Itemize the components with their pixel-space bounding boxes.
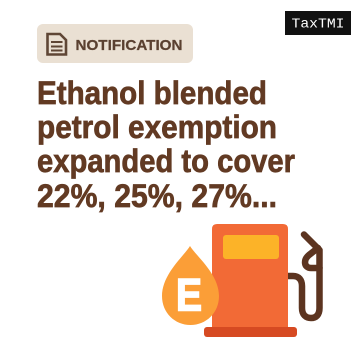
title: petrol exemption <box>37 109 277 145</box>
title <box>37 75 295 214</box>
title: Ethanol blended <box>37 75 267 111</box>
badge label: NOTIFICATION <box>76 37 182 54</box>
icon: ethanol drop <box>162 246 219 325</box>
icon: document <box>48 34 66 54</box>
logo: TaxTMI: TaxTMI <box>292 16 344 32</box>
pump body <box>212 224 288 330</box>
logo: TaxTMI <box>285 11 351 35</box>
title: expanded to cover <box>37 143 295 179</box>
pump screen <box>223 235 279 259</box>
pump base <box>204 327 297 337</box>
icon: ethanol drop: E <box>176 270 202 320</box>
icon: fuel pump <box>162 224 320 337</box>
title: 22%, 25%, 27%... <box>37 178 277 214</box>
pump hose and nozzle <box>288 234 320 318</box>
badge: notification <box>37 24 193 63</box>
